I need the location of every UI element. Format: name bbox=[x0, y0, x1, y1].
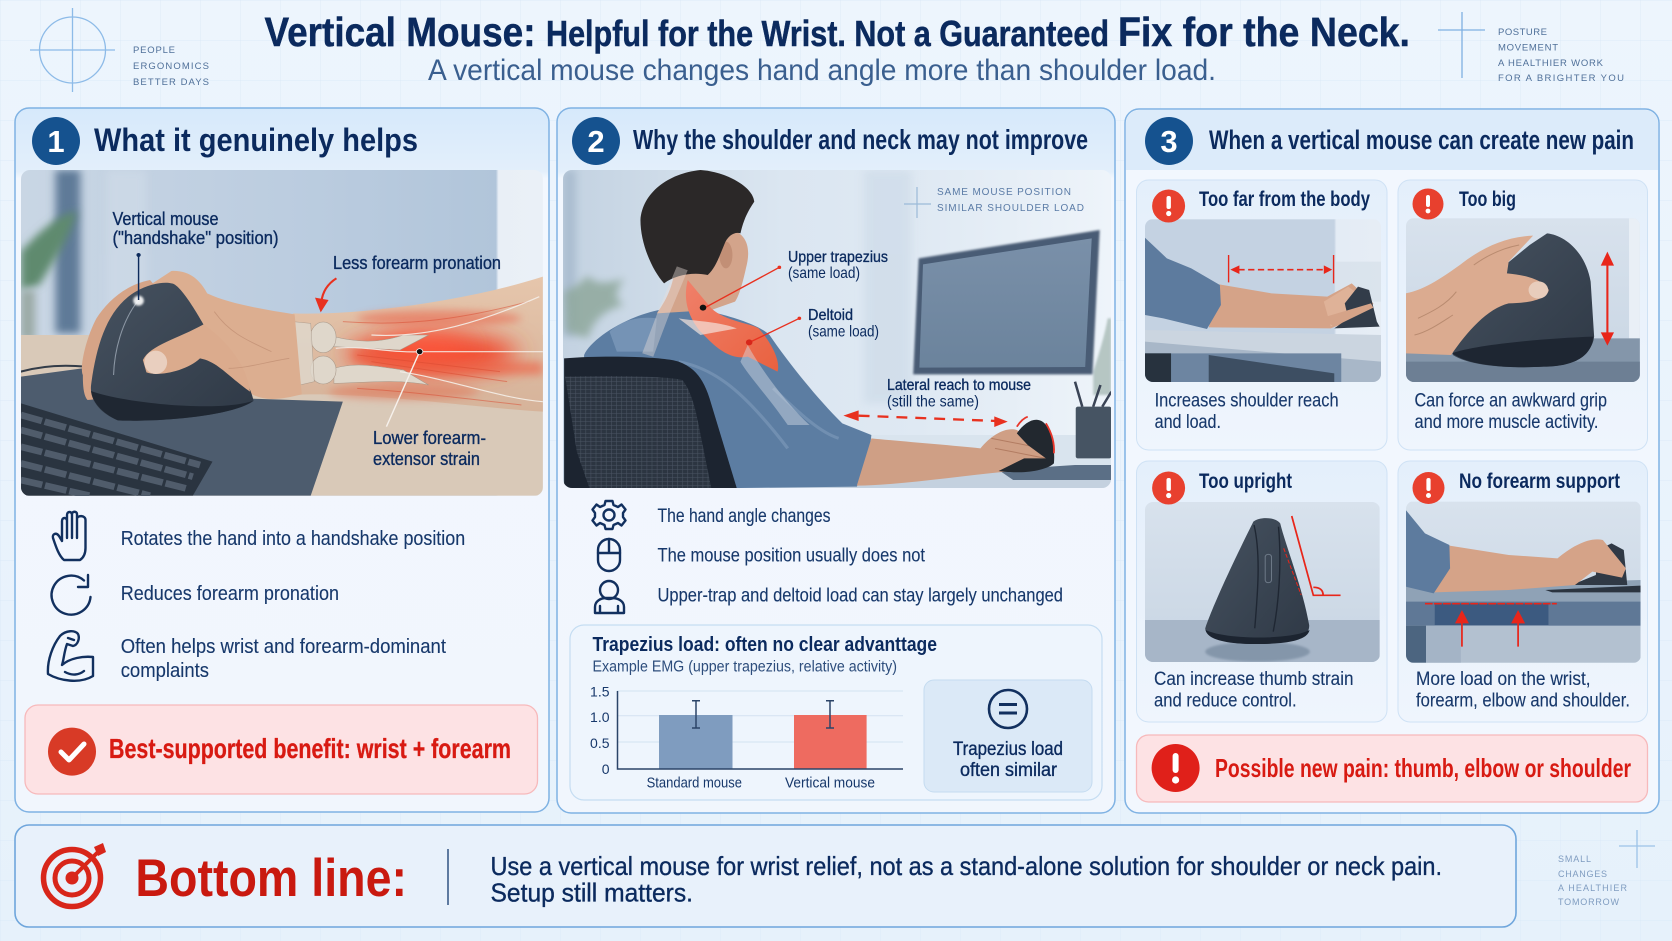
badge 2: 2 bbox=[587, 124, 605, 159]
decoration: right caption: FOR A BRIGHTER YOU bbox=[1498, 73, 1624, 84]
caption on photo: SIMILAR SHOULDER LOAD bbox=[937, 203, 1084, 214]
decoration: bottom-right caption: A HEALTHIER bbox=[1558, 883, 1628, 893]
icon: flexed arm bbox=[48, 631, 93, 681]
icon: person bbox=[595, 581, 624, 613]
callout: best-supported benefit bbox=[25, 705, 538, 794]
text: hand angle: The hand angle changes bbox=[658, 506, 830, 527]
callout text: Best-supported benefit: wrist + forearm bbox=[109, 733, 511, 764]
chart subtitle: Example EMG (upper trapezius, relative activity) bbox=[592, 659, 897, 676]
decoration: bottom-right caption: CHANGES bbox=[1558, 869, 1607, 879]
card text: and reduce control. bbox=[1154, 691, 1297, 712]
decoration: right caption: A HEALTHIER WORK bbox=[1498, 58, 1604, 69]
heading 1: What it genuinely helps bbox=[94, 122, 418, 158]
decoration: bottom-right caption: SMALL bbox=[1558, 854, 1591, 864]
summary text: often similar bbox=[960, 760, 1058, 781]
callouts on forearm image: ("handshake" position) bbox=[112, 228, 278, 248]
callout: upper trapezius: Upper trapezius bbox=[788, 249, 888, 266]
bottom line message bbox=[490, 851, 1442, 908]
decoration: left caption: ERGONOMICS bbox=[133, 61, 209, 72]
callout: upper trapezius: (same load) bbox=[788, 265, 860, 282]
decoration: left crosshair bbox=[30, 8, 115, 92]
icon: target bbox=[44, 843, 106, 906]
decoration: right caption: MOVEMENT bbox=[1498, 42, 1558, 54]
caption on photo bbox=[938, 188, 1084, 211]
text: helps complaints bbox=[121, 635, 446, 682]
bottom line banner bbox=[15, 825, 1516, 927]
card text: More load on the wrist, bbox=[1416, 669, 1591, 690]
card: too big bbox=[1398, 180, 1648, 450]
bar: vertical mouse bbox=[794, 715, 867, 769]
title bbox=[264, 9, 1410, 55]
icon: mouse bbox=[598, 539, 620, 571]
decoration: right cross bbox=[1438, 12, 1485, 78]
icon: check badge bbox=[48, 728, 96, 776]
card text: forearm, elbow and shoulder. bbox=[1416, 691, 1630, 712]
panel 2: why the shoulder and neck may not improve bbox=[557, 108, 1115, 813]
card text: Can force an awkward grip bbox=[1414, 391, 1607, 412]
illustration: man at desk, back view bbox=[563, 170, 1111, 488]
callouts on forearm image bbox=[112, 209, 501, 469]
panel 3: when a vertical mouse can create new pain bbox=[1125, 109, 1659, 813]
illustration: forearm on vertical mouse bbox=[21, 170, 543, 496]
card title: Too far from the body bbox=[1199, 188, 1370, 211]
chart panel: trapezius load bbox=[570, 625, 1102, 800]
decoration: bottom-right caption bbox=[1558, 854, 1628, 907]
decoration: right caption bbox=[1498, 27, 1624, 84]
card text: Can increase thumb strain bbox=[1154, 669, 1354, 690]
decoration: bottom-right caption: TOMORROW bbox=[1558, 897, 1620, 907]
callout: lateral reach bbox=[887, 377, 1031, 410]
text: rotates hand: Rotates the hand into a handshake position bbox=[121, 527, 465, 550]
icon: warning bbox=[1412, 188, 1444, 220]
callouts on forearm image: Less forearm pronation bbox=[333, 253, 501, 273]
callouts on forearm image: extensor strain bbox=[373, 449, 480, 469]
title: Helpful for the Wrist. Not a Guaranteed bbox=[546, 13, 1109, 54]
callout: lateral reach: (still the same) bbox=[887, 394, 979, 410]
text: helps complaints: Often helps wrist and forearm-dominant bbox=[121, 635, 446, 658]
subtitle: A vertical mouse changes hand angle more than shoulder load. bbox=[428, 54, 1216, 87]
bar chart bbox=[590, 684, 903, 792]
bottom line message: Use a vertical mouse for wrist relief, not as a stand-alone solution for shoulder or neck pain. bbox=[490, 851, 1442, 881]
badge 1 bbox=[32, 117, 80, 165]
card text bbox=[1416, 669, 1630, 712]
icon: large warning bbox=[1152, 744, 1200, 792]
badge 3: 3 bbox=[1160, 124, 1178, 159]
card title: Too big bbox=[1459, 188, 1516, 211]
heading 2: Why the shoulder and neck may not improve bbox=[633, 124, 1088, 155]
bar chart: Standard mouse bbox=[647, 775, 742, 792]
panel 1: what it genuinely helps bbox=[15, 108, 549, 812]
text: upper-trap load: Upper-trap and deltoid load can stay largely unchanged bbox=[658, 586, 1063, 607]
decoration: right caption: POSTURE bbox=[1498, 27, 1547, 38]
title: Fix for the Neck. bbox=[1118, 9, 1410, 55]
decoration: left caption bbox=[133, 45, 209, 88]
caption on photo: SAME MOUSE POSITION bbox=[937, 187, 1071, 198]
icon: warning bbox=[1412, 472, 1444, 504]
callout: possible new pain bbox=[1136, 735, 1648, 802]
callout: deltoid: Deltoid bbox=[808, 307, 853, 324]
icon: equals bbox=[989, 690, 1027, 728]
bar: standard mouse bbox=[659, 715, 732, 769]
image: oversized mouse bbox=[1406, 218, 1640, 382]
badge 3 bbox=[1145, 117, 1193, 165]
text: reduces pronation: Reduces forearm pronation bbox=[121, 582, 339, 605]
icon: rotate arrow bbox=[52, 575, 90, 615]
image: reach too far bbox=[1145, 219, 1381, 382]
icon: hand bbox=[53, 512, 86, 560]
callouts on forearm image: Lower forearm- bbox=[373, 428, 486, 448]
card: too far from the body bbox=[1136, 180, 1387, 450]
bar chart: Vertical mouse bbox=[785, 775, 875, 792]
callout: lateral reach: Lateral reach to mouse bbox=[887, 377, 1031, 394]
icon: warning bbox=[1152, 190, 1185, 222]
text: helps complaints: complaints bbox=[121, 659, 209, 682]
card title: Too upright bbox=[1199, 470, 1292, 493]
text: mouse position: The mouse position usually does not bbox=[658, 546, 926, 567]
summary box: often similar bbox=[924, 680, 1092, 792]
card text: Increases shoulder reach bbox=[1155, 391, 1339, 412]
card title: No forearm support bbox=[1459, 470, 1620, 493]
summary text bbox=[953, 739, 1063, 781]
callout: deltoid: (same load) bbox=[808, 324, 879, 340]
decoration: left caption: BETTER DAYS bbox=[133, 77, 209, 88]
chart title: Trapezius load: often no clear advanttage bbox=[592, 634, 937, 656]
bottom line label: Bottom line: bbox=[135, 849, 407, 908]
callout: upper trapezius bbox=[788, 249, 888, 282]
callouts on forearm image: Vertical mouse bbox=[112, 209, 218, 229]
icon: warning bbox=[1152, 472, 1185, 504]
small cross mark bbox=[904, 187, 931, 218]
bar chart: 0 bbox=[602, 761, 610, 777]
decoration: left caption: PEOPLE bbox=[133, 45, 175, 56]
card text bbox=[1414, 391, 1607, 433]
card text bbox=[1155, 391, 1339, 433]
image: upright mouse bbox=[1145, 502, 1380, 662]
badge 1: 1 bbox=[47, 124, 65, 159]
card text: and more muscle activity. bbox=[1414, 412, 1598, 433]
decoration: bottom-right cross bbox=[1619, 830, 1655, 868]
badge 2 bbox=[572, 117, 620, 165]
card: too upright bbox=[1136, 461, 1387, 722]
card: no forearm support bbox=[1398, 461, 1648, 722]
bar chart: 1.5 bbox=[590, 684, 610, 700]
header bbox=[30, 8, 1624, 92]
icon: gear bbox=[592, 501, 626, 529]
title: Vertical Mouse: bbox=[264, 9, 536, 55]
bar chart: 1.0 bbox=[590, 709, 610, 725]
bottom line message: Setup still matters. bbox=[490, 878, 693, 908]
summary text: Trapezius load bbox=[953, 739, 1063, 760]
card text bbox=[1154, 669, 1354, 712]
card text: and load. bbox=[1155, 412, 1221, 433]
callout: deltoid bbox=[808, 307, 879, 340]
image: unsupported forearm bbox=[1406, 502, 1641, 663]
bar chart: 0.5 bbox=[590, 735, 610, 751]
